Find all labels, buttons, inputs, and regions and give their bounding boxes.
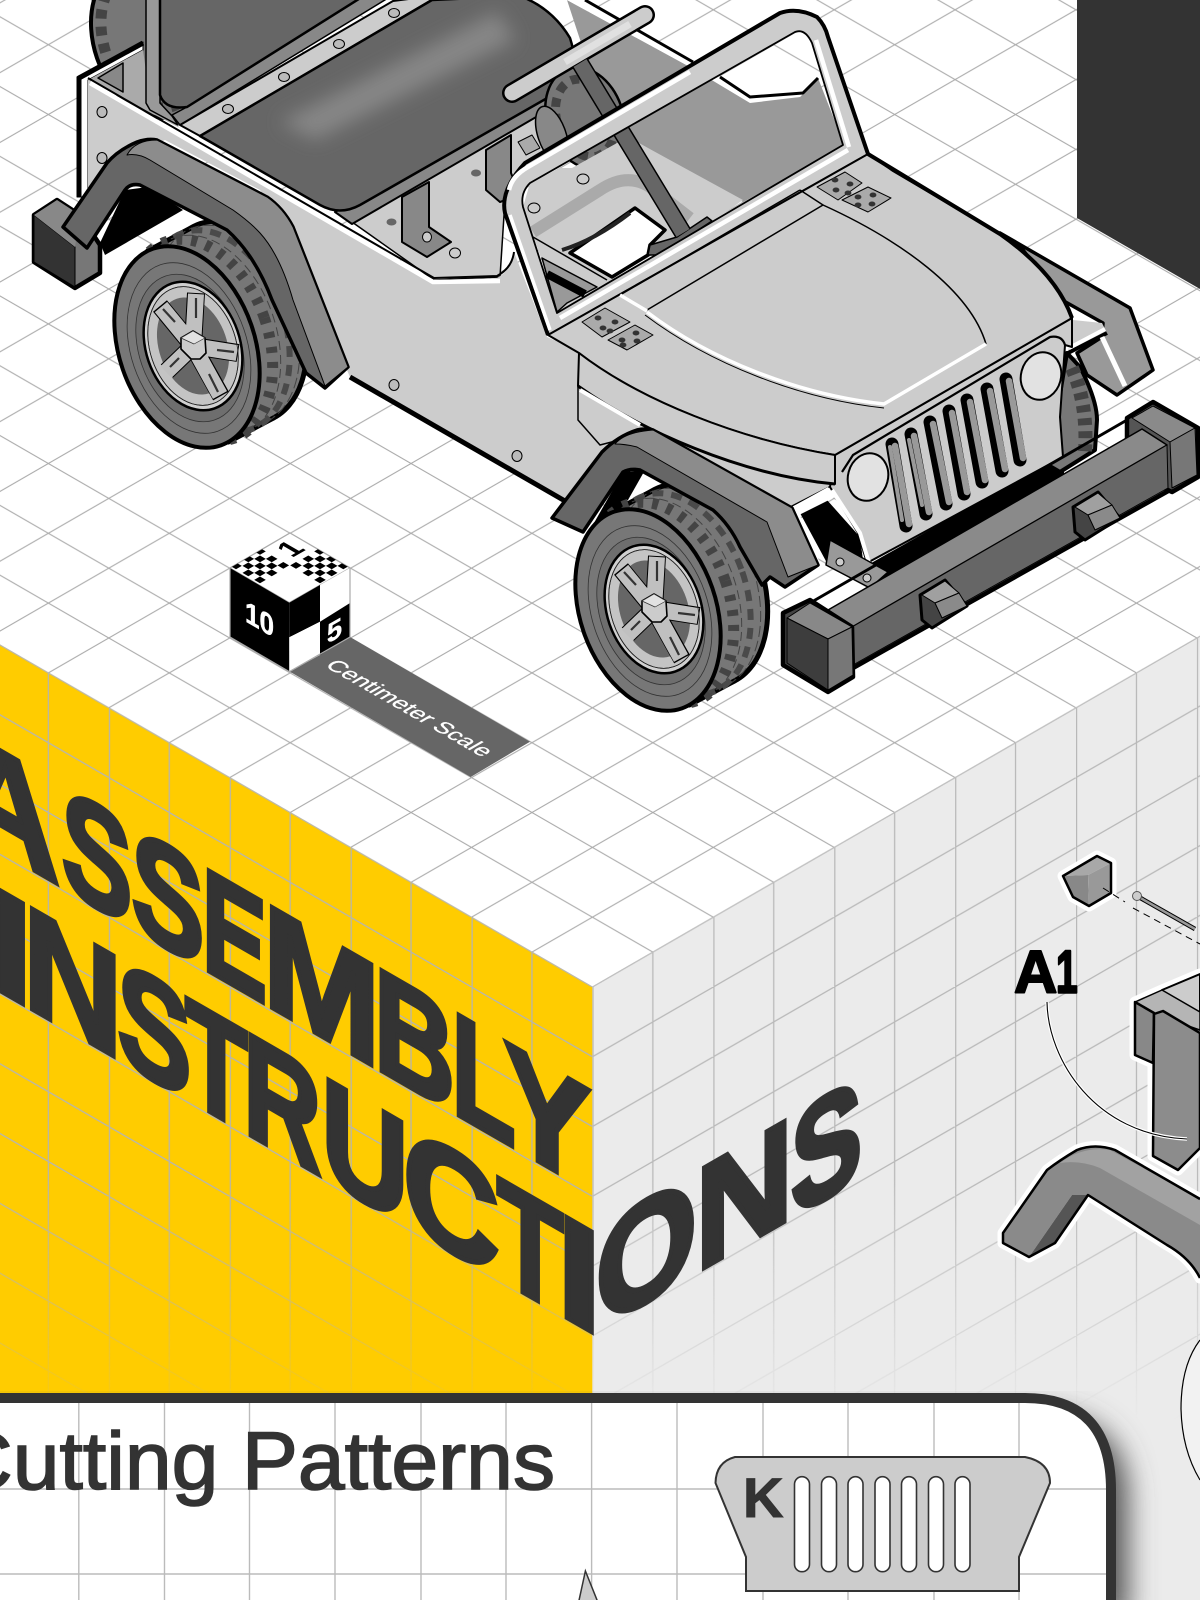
scale cube xyxy=(230,533,350,672)
part: circle arc xyxy=(1181,1340,1200,1480)
title: assembly instructions: B xyxy=(374,935,455,1145)
scale cube: 10 xyxy=(245,594,274,644)
side body panel xyxy=(88,78,640,501)
bumper beam xyxy=(810,420,1170,668)
right bumper end block xyxy=(1127,402,1198,492)
seat rail with bolts xyxy=(180,0,440,136)
title: assembly instructions xyxy=(0,691,862,1369)
round bar xyxy=(512,15,645,93)
part: screw and guide dashes xyxy=(1103,888,1200,944)
top surface grid xyxy=(0,0,1200,1000)
scale cube: 5 xyxy=(327,612,342,650)
scale cube: 1 xyxy=(269,537,313,562)
floor inside the cage xyxy=(523,142,743,312)
far body wall xyxy=(567,0,845,202)
cockpit floor xyxy=(352,93,574,280)
grille face xyxy=(830,318,1072,563)
rear wheel arch shadow xyxy=(100,187,183,255)
title: assembly instructions: N xyxy=(695,1086,793,1305)
rear wheel xyxy=(89,202,332,467)
cube right face xyxy=(289,568,350,672)
pattern piece K xyxy=(716,1457,1050,1591)
diagonal support rod xyxy=(580,63,683,233)
front wheel xyxy=(550,465,793,730)
front fender xyxy=(552,429,835,587)
exploded parts xyxy=(1003,856,1200,1480)
front bracket plate xyxy=(826,540,888,588)
rear seat back xyxy=(146,0,393,125)
title: assembly instructions: S xyxy=(62,754,132,958)
panel: cutting patterns xyxy=(0,1398,1111,1600)
grey right wall xyxy=(592,636,1200,1600)
title: assembly instructions: T xyxy=(497,1145,564,1347)
callout: A1 xyxy=(1014,938,1187,1139)
title: assembly instructions: E xyxy=(202,835,267,1036)
far rear tyre xyxy=(71,0,229,134)
roll cage xyxy=(504,11,868,335)
part: curved arm xyxy=(1003,1146,1200,1278)
front bumper xyxy=(783,402,1198,692)
hood hinges xyxy=(582,172,891,350)
part: bolt cap xyxy=(1063,856,1111,906)
seat base xyxy=(335,78,574,224)
title: assembly instructions: C xyxy=(403,1091,499,1310)
headlights xyxy=(842,348,1067,505)
title: assembly instructions: S xyxy=(132,795,204,1000)
centimeter scale label xyxy=(290,637,530,777)
title: assembly instructions: R xyxy=(243,999,321,1207)
inner tyre and wheel xyxy=(518,56,638,180)
callout: A1: 1 xyxy=(1056,938,1078,1006)
cube checker top xyxy=(230,548,349,583)
left bumper end block xyxy=(783,600,853,692)
far front fender xyxy=(1000,233,1153,395)
yellow left wall xyxy=(0,645,592,1393)
under-hood panel xyxy=(578,386,835,507)
grille slots xyxy=(890,379,1023,526)
rear bumper block xyxy=(34,200,100,288)
title: assembly instructions: N xyxy=(23,873,123,1093)
title: assembly instructions: S xyxy=(117,928,191,1133)
callout: A1: A xyxy=(1014,939,1057,1006)
centimeter scale label: Centimeter Scale xyxy=(320,656,500,760)
title: assembly instructions: I xyxy=(556,1179,602,1369)
title: assembly instructions: U xyxy=(321,1045,409,1258)
front underside shadow xyxy=(800,500,880,585)
rear seat cushion xyxy=(200,0,574,210)
dark block top right xyxy=(1077,0,1200,289)
front wheel arch shadow xyxy=(590,470,645,530)
title: assembly instructions: T xyxy=(185,967,248,1165)
panel shadow xyxy=(0,1412,1128,1600)
rear fender xyxy=(63,139,348,388)
cube left face xyxy=(230,568,289,672)
seat posts and mounting bolts xyxy=(386,135,520,258)
title: assembly instructions: O xyxy=(596,1141,697,1362)
title: assembly instructions: Y xyxy=(504,1010,591,1223)
tailgate frame xyxy=(77,42,180,197)
pattern piece K: K xyxy=(743,1466,783,1529)
black gap under grille xyxy=(866,463,1064,600)
jeep illustration xyxy=(34,0,1198,730)
title: assembly instructions: S xyxy=(791,1044,862,1249)
pattern piece spike xyxy=(578,1571,599,1600)
title: assembly instructions: L xyxy=(452,981,516,1180)
bumper studs xyxy=(920,492,1120,628)
part: bracket xyxy=(1135,974,1200,1170)
title: assembly instructions: M xyxy=(263,870,380,1101)
hood xyxy=(548,154,1072,484)
far front tyre xyxy=(1048,353,1097,472)
